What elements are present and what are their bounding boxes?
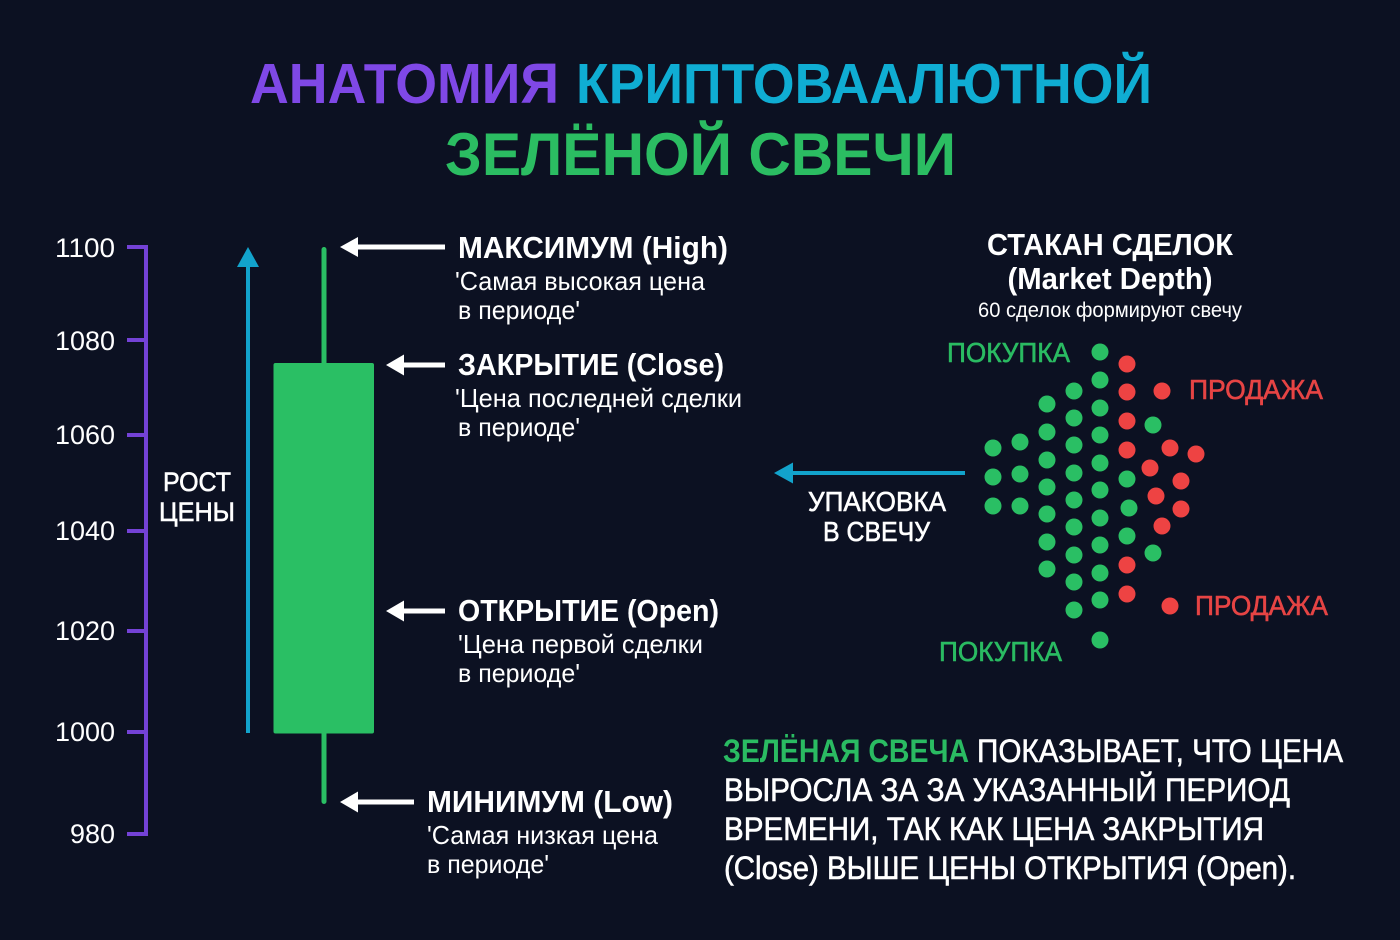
- price axis: [55, 233, 146, 849]
- explanation text: ВЫРОСЛА ЗА ЗА УКАЗАННЫЙ ПЕРИОД: [724, 772, 1290, 808]
- label: open: ОТКРЫТИЕ (Open): [458, 593, 719, 628]
- label: high: [455, 230, 728, 325]
- sell dots: [1118, 356, 1204, 614]
- price axis: 980: [70, 819, 115, 849]
- price axis: 1080: [55, 326, 115, 356]
- label: price growth: РОСТ: [163, 467, 231, 497]
- heading: market depth: 60 сделок формируют свечу: [978, 299, 1242, 322]
- label: sell bottom: ПРОДАЖА: [1195, 590, 1328, 621]
- label: open: в периоде': [458, 658, 580, 688]
- label: high: 'Самая высокая цена: [455, 266, 706, 296]
- label: price growth: ЦЕНЫ: [159, 497, 235, 527]
- label: close: ЗАКРЫТИЕ (Close): [458, 347, 724, 382]
- label: packing into candle: УПАКОВКА: [808, 486, 946, 517]
- arrow: high: [340, 237, 445, 257]
- label: price growth: [159, 467, 235, 527]
- title: ЗЕЛЁНОЙ СВЕЧИ: [445, 121, 956, 188]
- price axis: 1100: [55, 233, 115, 263]
- price axis: 1020: [55, 616, 115, 646]
- price axis: 1000: [55, 717, 115, 747]
- label: high: МАКСИМУМ (High): [458, 230, 728, 265]
- label: buy top: ПОКУПКА: [947, 337, 1070, 368]
- arrow: low: [340, 792, 414, 812]
- explanation text: (Close) ВЫШЕ ЦЕНЫ ОТКРЫТИЯ (Open).: [724, 850, 1296, 886]
- heading: market depth: [978, 227, 1242, 322]
- arrow: close: [386, 354, 445, 376]
- explanation text: ВРЕМЕНИ, ТАК КАК ЦЕНА ЗАКРЫТИЯ: [724, 811, 1264, 847]
- green candle: [274, 247, 374, 804]
- price axis: 1060: [55, 420, 115, 450]
- label: low: [427, 784, 673, 879]
- label: buy bottom: ПОКУПКА: [939, 636, 1062, 667]
- label: packing into candle: В СВЕЧУ: [823, 516, 930, 547]
- label: low: 'Самая низкая цена: [427, 820, 659, 850]
- heading: market depth: (Market Depth): [1008, 261, 1212, 296]
- price axis: 1040: [55, 516, 115, 546]
- arrow: price growth: [237, 247, 259, 733]
- label: low: МИНИМУМ (Low): [427, 784, 673, 819]
- explanation text: ЗЕЛЁНАЯ СВЕЧА: [723, 733, 969, 769]
- label: open: [458, 593, 719, 688]
- label: sell top: ПРОДАЖА: [1189, 374, 1323, 405]
- explanation text: ПОКАЗЫВАЕТ, ЧТО ЦЕНА: [977, 733, 1344, 769]
- arrow: open: [386, 600, 445, 622]
- label: close: 'Цена последней сделки: [455, 383, 742, 413]
- label: close: [455, 347, 742, 442]
- label: open: 'Цена первой сделки: [458, 629, 703, 659]
- title: КРИПТОВААЛЮТНОЙ: [576, 51, 1152, 116]
- title: АНАТОМИЯ: [250, 52, 559, 116]
- label: low: в периоде': [427, 849, 549, 879]
- heading: market depth: СТАКАН СДЕЛОК: [987, 227, 1233, 262]
- title: [250, 51, 1152, 188]
- buy dots: [984, 344, 1162, 648]
- label: high: в периоде': [458, 295, 580, 325]
- label: packing into candle: [808, 486, 946, 547]
- label: close: в периоде': [458, 412, 580, 442]
- arrow: packing into candle: [774, 462, 965, 484]
- explanation text: [723, 733, 1344, 886]
